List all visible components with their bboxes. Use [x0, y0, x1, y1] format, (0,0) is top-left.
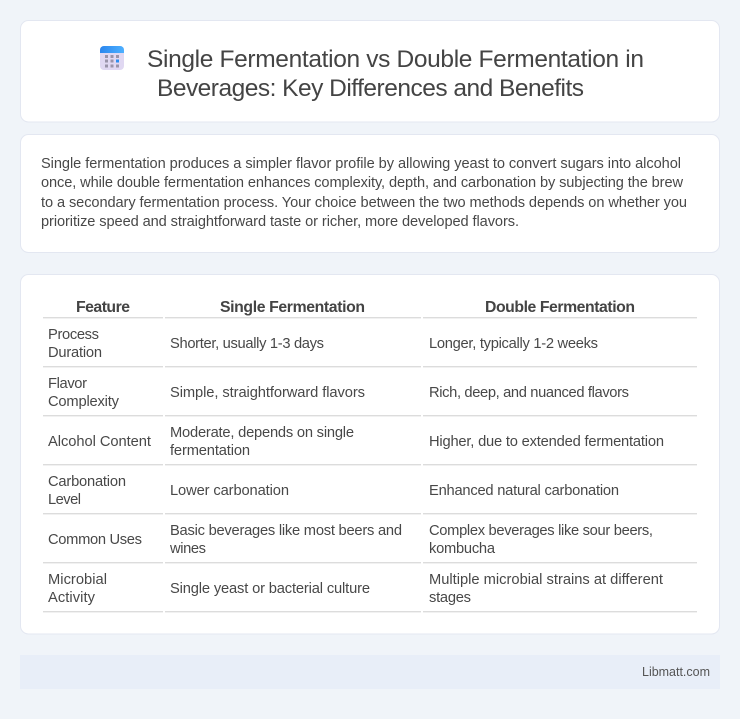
row: microbial activity: Single yeast or bacterial culture: [170, 581, 370, 597]
row: common uses: wines: [169, 541, 206, 557]
row: microbial activity: stages: [429, 590, 471, 606]
row: carbonation level: Level: [48, 492, 81, 508]
row: alcohol content: Alcohol Content: [48, 434, 151, 450]
row: process duration: Process: [48, 327, 99, 343]
row: flavor complexity: Rich, deep, and nuanced flavors: [429, 385, 629, 401]
text block: introduction: [41, 156, 687, 230]
footer: Libmatt.com: [642, 665, 710, 679]
row: process duration: Longer, typically 1-2 weeks: [429, 336, 598, 352]
table header: Double Fermentation: [485, 299, 635, 316]
row: flavor complexity: [48, 376, 629, 410]
row: alcohol content: Moderate, depends on single: [170, 425, 354, 441]
panel: comparison table: [20, 274, 720, 634]
row: flavor complexity: Flavor: [48, 376, 87, 392]
text block: introduction: Single fermentation produces a simpler flavor profile by allowing yeast to convert sugars into alcohol: [41, 156, 681, 172]
text block: introduction: once, while double fermentation enhances complexity, depth, and carbonation by subjecting the brew: [41, 175, 683, 191]
row: process duration: Duration: [48, 345, 102, 361]
row: microbial activity: Activity: [48, 590, 96, 606]
icon: calendar: [100, 46, 124, 70]
row: process duration: [48, 327, 598, 361]
row: carbonation level: Carbonation: [48, 474, 126, 490]
text block: introduction: prioritize speed and straightforward taste or richer, more developed flavors.: [41, 214, 519, 230]
table header: Feature: [76, 299, 130, 316]
row: alcohol content: fermentation: [170, 443, 250, 459]
text block: introduction: to a secondary fermentation process. Your choice between the two methods depends on whether you: [41, 195, 687, 211]
row: alcohol content: [48, 425, 664, 459]
row: microbial activity: [48, 572, 663, 606]
row: flavor complexity: Complexity: [48, 394, 120, 410]
title: Beverages: Key Differences and Benefits: [157, 75, 584, 102]
row: process duration: Shorter, usually 1-3 days: [170, 336, 324, 352]
row: common uses: Complex beverages like sour beers,: [429, 523, 653, 539]
row: alcohol content: Higher, due to extended fermentation: [429, 434, 664, 450]
row: carbonation level: Enhanced natural carbonation: [429, 483, 619, 499]
row: common uses: Basic beverages like most beers and: [170, 523, 402, 539]
row: common uses: kombucha: [429, 541, 496, 557]
footer: [20, 655, 720, 689]
row: carbonation level: Lower carbonation: [170, 483, 289, 499]
row: microbial activity: Multiple microbial strains at different: [429, 572, 663, 588]
row: carbonation level: [48, 474, 619, 508]
table header: Single Fermentation: [220, 299, 365, 316]
table header: [76, 299, 635, 316]
title: [147, 46, 644, 102]
row: common uses: [48, 523, 653, 557]
title: Single Fermentation vs Double Fermentation in: [147, 46, 644, 73]
row: common uses: Common Uses: [48, 532, 142, 548]
row: flavor complexity: Simple, straightforward flavors: [170, 385, 365, 401]
panel: title card: [20, 20, 720, 122]
row: microbial activity: Microbial: [48, 572, 107, 588]
panel: introduction: [20, 134, 720, 252]
